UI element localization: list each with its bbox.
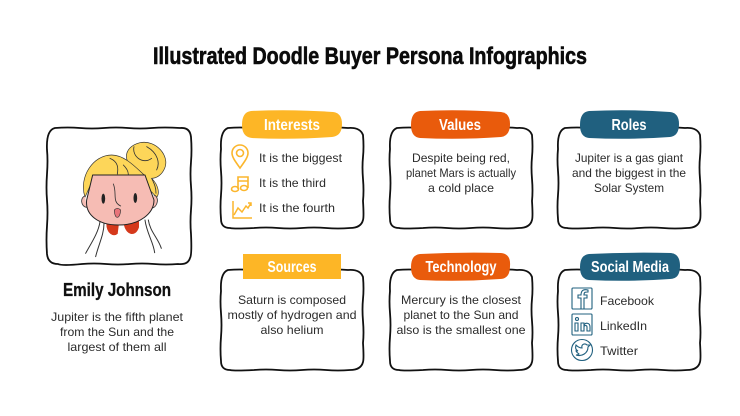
body text: Mercury is the closest bbox=[401, 293, 522, 307]
illustration: woman portrait bbox=[82, 142, 166, 257]
card outline bbox=[220, 270, 364, 370]
heading text: Technology bbox=[426, 259, 497, 276]
heading text: Sources bbox=[268, 259, 317, 276]
body text bbox=[406, 151, 516, 195]
heading pill: roles bbox=[580, 110, 679, 139]
panel: persona bbox=[46, 128, 192, 354]
panel: values bbox=[390, 110, 532, 228]
body text: also is the smallest one bbox=[396, 323, 526, 337]
body text bbox=[572, 151, 686, 195]
portrait frame bbox=[46, 128, 192, 265]
panel: social media bbox=[558, 253, 700, 370]
icon: map pin bbox=[232, 145, 248, 168]
body text bbox=[228, 293, 356, 337]
list text: Facebook bbox=[600, 294, 655, 308]
heading pill: values bbox=[411, 110, 510, 139]
list text: It is the biggest bbox=[259, 151, 343, 165]
panel: interests: It is the third bbox=[259, 176, 326, 190]
persona description: from the Sun and the bbox=[60, 325, 174, 339]
icon: music note bbox=[232, 177, 248, 192]
icon: twitter bbox=[572, 340, 592, 360]
panel: sources bbox=[220, 254, 364, 370]
card outline bbox=[390, 128, 532, 228]
panel: social media: LinkedIn bbox=[600, 319, 647, 333]
title: Illustrated Doodle Buyer Persona Infographics bbox=[153, 43, 587, 70]
persona description: largest of them all bbox=[68, 340, 166, 354]
heading text: Roles bbox=[612, 117, 647, 134]
persona description: Jupiter is the fifth planet bbox=[51, 310, 184, 324]
body text: Solar System bbox=[594, 181, 664, 195]
card outline bbox=[558, 270, 700, 370]
panel: social media: Twitter bbox=[600, 344, 638, 358]
persona description bbox=[51, 310, 184, 354]
body text: Jupiter is a gas giant bbox=[575, 151, 684, 165]
body text: a cold place bbox=[428, 181, 494, 195]
card outline bbox=[220, 128, 364, 228]
heading text: Social Media bbox=[591, 259, 669, 276]
heading text: Interests bbox=[264, 117, 320, 134]
panel: technology bbox=[390, 253, 532, 370]
card outline bbox=[558, 128, 700, 228]
icon: linkedin bbox=[572, 314, 592, 335]
body text: planet to the Sun and bbox=[404, 308, 518, 322]
body text: Despite being red, bbox=[412, 151, 510, 165]
heading pill: social media bbox=[580, 253, 680, 281]
body text bbox=[396, 293, 526, 337]
body text: mostly of hydrogen and bbox=[228, 308, 356, 322]
icon: facebook bbox=[572, 288, 592, 309]
panel: roles bbox=[558, 110, 700, 228]
heading pill: technology bbox=[411, 253, 510, 281]
heading box: sources bbox=[243, 254, 341, 279]
icon: growth chart bbox=[233, 201, 252, 218]
body text: and the biggest in the bbox=[572, 166, 686, 180]
heading text: Values bbox=[439, 117, 481, 134]
body text: also helium bbox=[260, 323, 324, 337]
heading pill: interests bbox=[242, 110, 342, 139]
card outline bbox=[390, 270, 532, 370]
panel: interests bbox=[220, 110, 364, 228]
panel: interests: It is the fourth bbox=[259, 201, 335, 215]
body text: Saturn is composed bbox=[238, 293, 346, 307]
body text: planet Mars is actually bbox=[406, 166, 516, 180]
persona name: Emily Johnson bbox=[63, 280, 171, 300]
